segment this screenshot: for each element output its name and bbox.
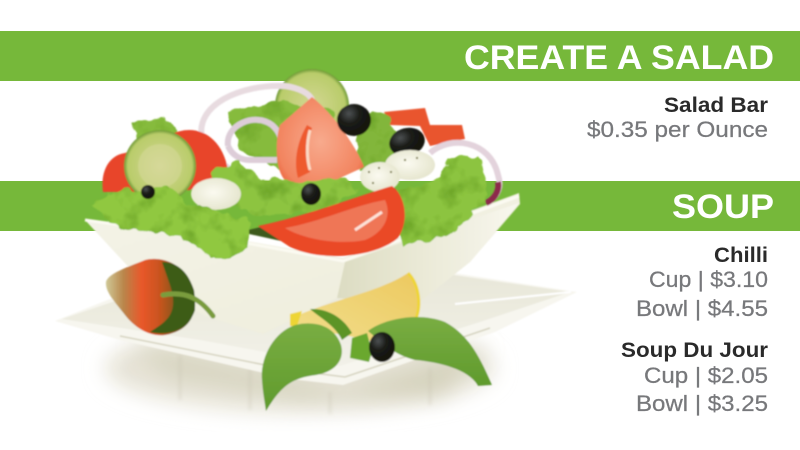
price: soup du jour bowl: Bowl | $3.25 [636,391,768,416]
small onion ring [228,120,281,160]
mozzarella pieces [191,150,435,210]
back lettuce [132,100,400,175]
right onion ring [430,143,500,203]
plate [55,272,577,385]
green band: create a salad [0,31,800,81]
bowl [85,193,520,334]
back cucumber slice [275,69,349,143]
price: chilli cup: Cup | $3.10 [649,267,768,292]
basil leaves [262,309,492,411]
tomato wedge lower [258,186,405,256]
olives upper [337,104,428,160]
lettuce front left [92,187,250,258]
lettuce front right [398,155,488,246]
back onion ring [201,86,312,172]
price: chilli bowl: Bowl | $4.55 [636,296,768,321]
item: chilli: Chilli [714,244,768,267]
pepper [106,259,213,335]
item: soup du jour: Soup Du Jour [621,339,768,362]
small olives [141,183,321,205]
back red pepper strips [384,108,465,146]
heading: create a salad: CREATE A SALAD [464,39,774,77]
price: salad bar: $0.35 per Ounce [587,117,768,142]
salad bowl photo illustration [55,69,577,414]
olive front [369,332,395,362]
red tomato slice left [102,130,228,192]
lemon wedge [290,273,419,342]
cucumber slice left [124,130,196,202]
green band: soup [0,181,800,231]
tomato wedge upper [277,97,364,196]
table surface shadow [105,324,495,414]
price: soup du jour cup: Cup | $2.05 [644,363,768,388]
lettuce center [210,160,358,216]
item: salad bar: Salad Bar [664,94,768,117]
heading: soup: SOUP [672,188,774,226]
